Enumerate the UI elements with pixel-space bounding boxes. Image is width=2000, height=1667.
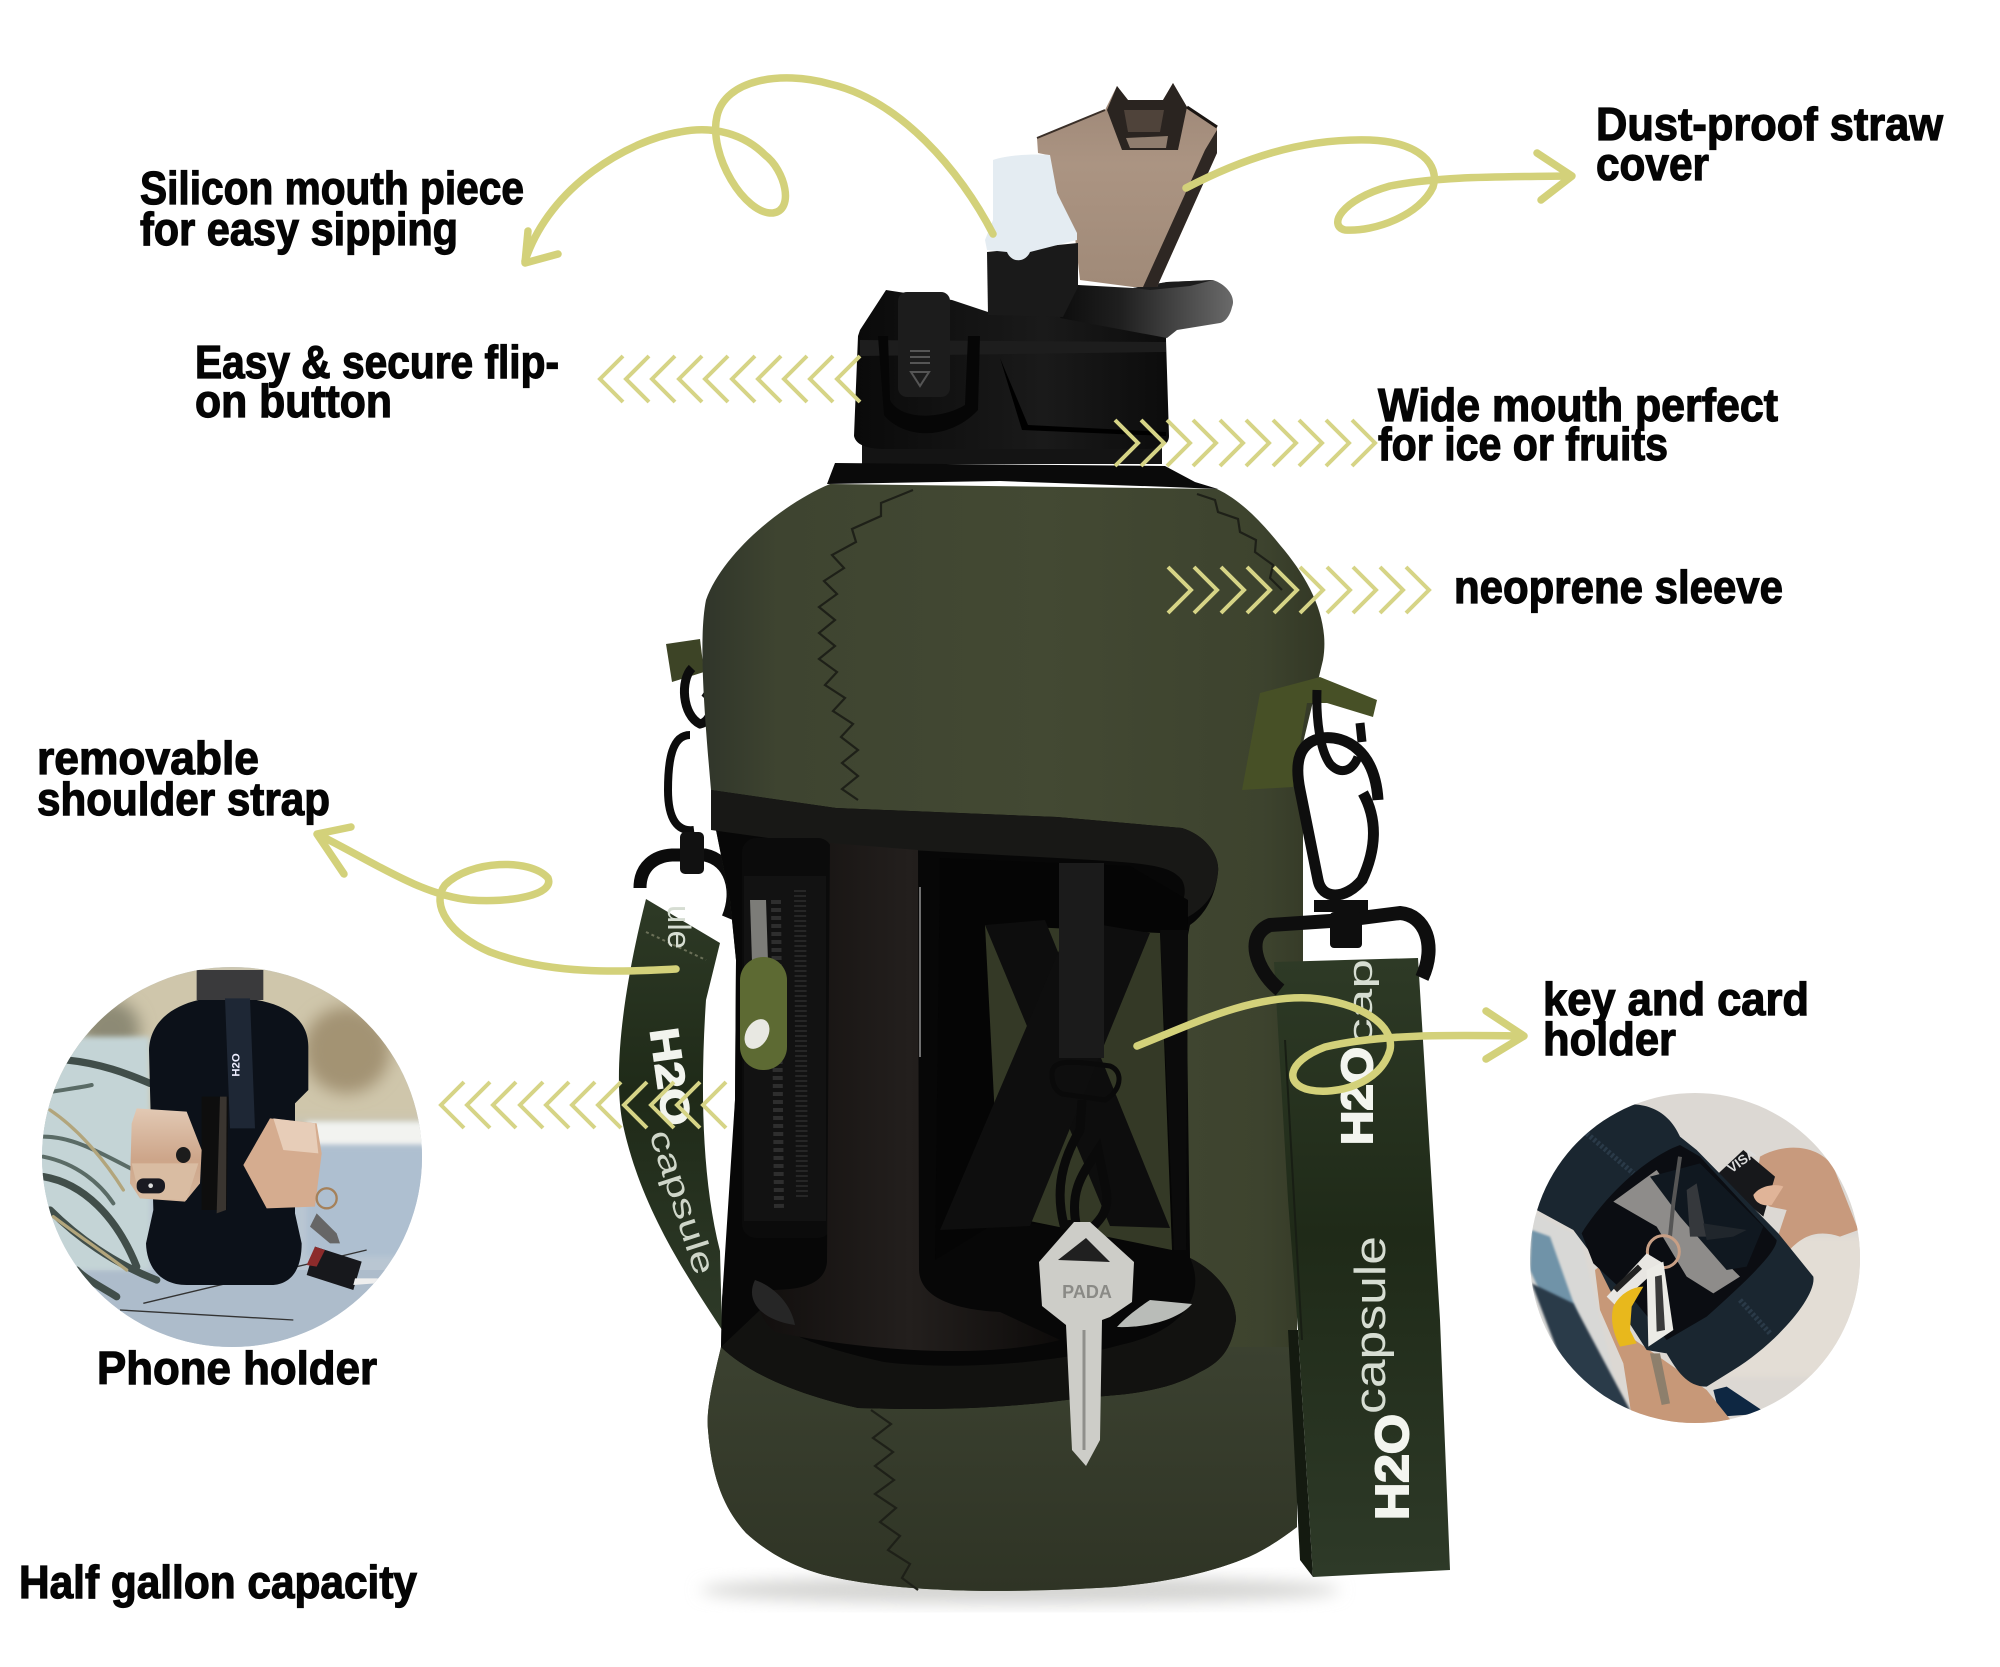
window opening rim (711, 790, 1236, 1409)
photo background (33, 960, 433, 1360)
left webbing tab and clip (640, 639, 733, 918)
photo background (1530, 1093, 1860, 1423)
product photo: bottle in neoprene sleeve (619, 83, 1450, 1604)
key: PADA (1062, 1282, 1112, 1302)
photo circle: phone holder: H2O (230, 1053, 242, 1077)
left strap behind bottle: capsule (642, 1125, 723, 1279)
label: removable shoulder strap (37, 732, 330, 825)
gold phones (130, 1108, 202, 1202)
chevron row: neoprene sleeve (1168, 567, 1429, 613)
label: key and card holder (1543, 973, 1809, 1065)
silver handle (1613, 1170, 1740, 1293)
chevron row: wide mouth (1115, 420, 1375, 466)
label: silicon mouth piece (140, 162, 524, 255)
right strap: capsule (1346, 1236, 1395, 1414)
chevron row: flip-on button (600, 356, 860, 402)
bottle cap (854, 280, 1233, 449)
keys (1670, 1157, 1680, 1237)
photo circle: key and card holder: VISA (1725, 1145, 1759, 1176)
label: flip-on button: on button (195, 375, 392, 427)
side zipper (744, 876, 826, 1221)
label: removable shoulder strap: shoulder strap (37, 773, 330, 825)
arrow: silicon mouth piece (525, 78, 993, 263)
window top band (711, 790, 1218, 930)
flip button (878, 292, 980, 433)
label: removable shoulder strap: removable (37, 732, 259, 784)
sleeve stitching (819, 490, 1282, 1590)
label: dust-proof straw cover: Dust-proof straw (1596, 98, 1943, 150)
right strap: H2O (1366, 1414, 1418, 1520)
right webbing tab (1242, 677, 1377, 790)
right strap: cap (1342, 959, 1380, 1045)
label: silicon mouth piece: for easy sipping (140, 203, 458, 255)
photo circle: key and card holder (1530, 1093, 1860, 1423)
label: neoprene sleeve: neoprene sleeve (1454, 561, 1783, 613)
black bottle (197, 970, 263, 1000)
label: flip-on button (195, 336, 559, 427)
photo circle: phone holder (42, 967, 422, 1347)
black sleeve (1537, 1104, 1814, 1387)
label: key and card holder: holder (1543, 1013, 1676, 1065)
label: wide mouth: Wide mouth perfect (1378, 379, 1778, 431)
label: dust-proof straw cover (1596, 98, 1943, 190)
sleeve body (702, 484, 1324, 1591)
label: silicon mouth piece: Silicon mouth piece (140, 162, 524, 214)
label: wide mouth: for ice or fruits (1378, 418, 1668, 470)
silicone mouth piece (985, 155, 1077, 260)
keys (310, 1213, 340, 1243)
left strap behind bottle (619, 899, 723, 1330)
label: dust-proof straw cover: cover (1596, 138, 1709, 190)
arrow: removable shoulder strap (317, 827, 676, 971)
key (1039, 1222, 1134, 1466)
hands (1595, 1266, 1733, 1427)
arrow: dust-proof straw cover (1186, 140, 1572, 230)
right strap (1274, 958, 1450, 1577)
neck (862, 444, 1162, 464)
label: key and card holder: key and card (1543, 973, 1809, 1025)
right swivel clip and D ring (1256, 690, 1429, 990)
label: wide mouth (1378, 379, 1778, 470)
dark window interior (742, 838, 1188, 1260)
arrow: key and card holder (1137, 998, 1524, 1091)
drinking straw block (987, 243, 1078, 317)
label: flip-on button: Easy & secure flip- (195, 336, 559, 388)
left strap behind bottle: ule (661, 905, 697, 949)
right strap: H2O (1333, 1047, 1382, 1145)
label: phone holder: Phone holder (97, 1342, 377, 1394)
grasses (33, 1037, 157, 1297)
cap carry handle (1060, 280, 1233, 338)
dust-proof straw cover (1037, 83, 1217, 287)
snap hook (1052, 1062, 1119, 1228)
chevron row: phone holder (441, 1082, 726, 1128)
zipper pull (739, 957, 787, 1070)
black card (1715, 1150, 1775, 1217)
left strap behind bottle: H2O (641, 1025, 698, 1128)
black collar (827, 463, 1218, 489)
right compartment with sleeve lining (935, 858, 1188, 1260)
label: half gallon capacity: Half gallon capacity (19, 1556, 417, 1608)
window lower band (721, 1258, 1236, 1409)
glossy bottle handle (760, 843, 1060, 1351)
